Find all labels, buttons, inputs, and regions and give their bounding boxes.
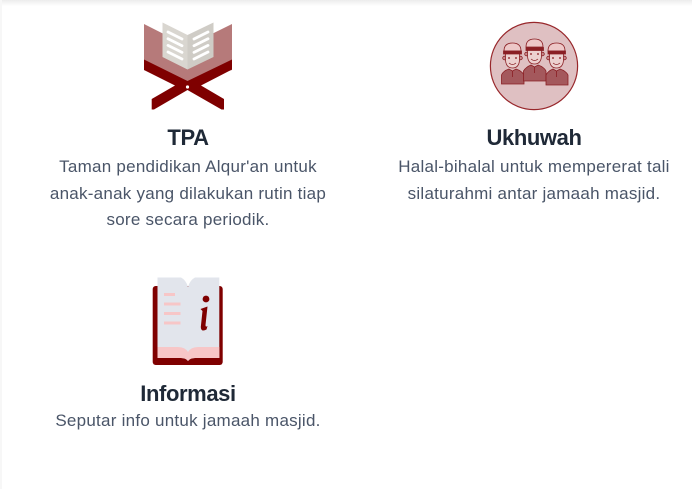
heading: TPA: TPA	[167, 125, 209, 150]
text: TPA description: Taman pendidikan Alqur'an untuk	[59, 157, 317, 176]
heading: Informasi: Informasi	[140, 381, 236, 406]
text: TPA description: sore secara periodik.	[106, 210, 270, 229]
text: TPA description	[50, 157, 326, 229]
icon: information book	[152, 278, 223, 365]
heading: Ukhuwah: Ukhuwah	[486, 125, 582, 150]
text: Ukhuwah description: Halal-bihalal untuk mempererat tali	[398, 157, 670, 176]
text: Ukhuwah description: silaturahmi antar jamaah masjid.	[408, 184, 660, 202]
icon: three men in caps	[490, 22, 578, 110]
icon: open Quran on stand	[144, 22, 232, 110]
text: TPA description: anak-anak yang dilakukan rutin tiap	[50, 184, 326, 202]
text: Informasi description: Seputar info untuk jamaah masjid.	[55, 411, 321, 430]
text: Ukhuwah description	[398, 157, 670, 202]
